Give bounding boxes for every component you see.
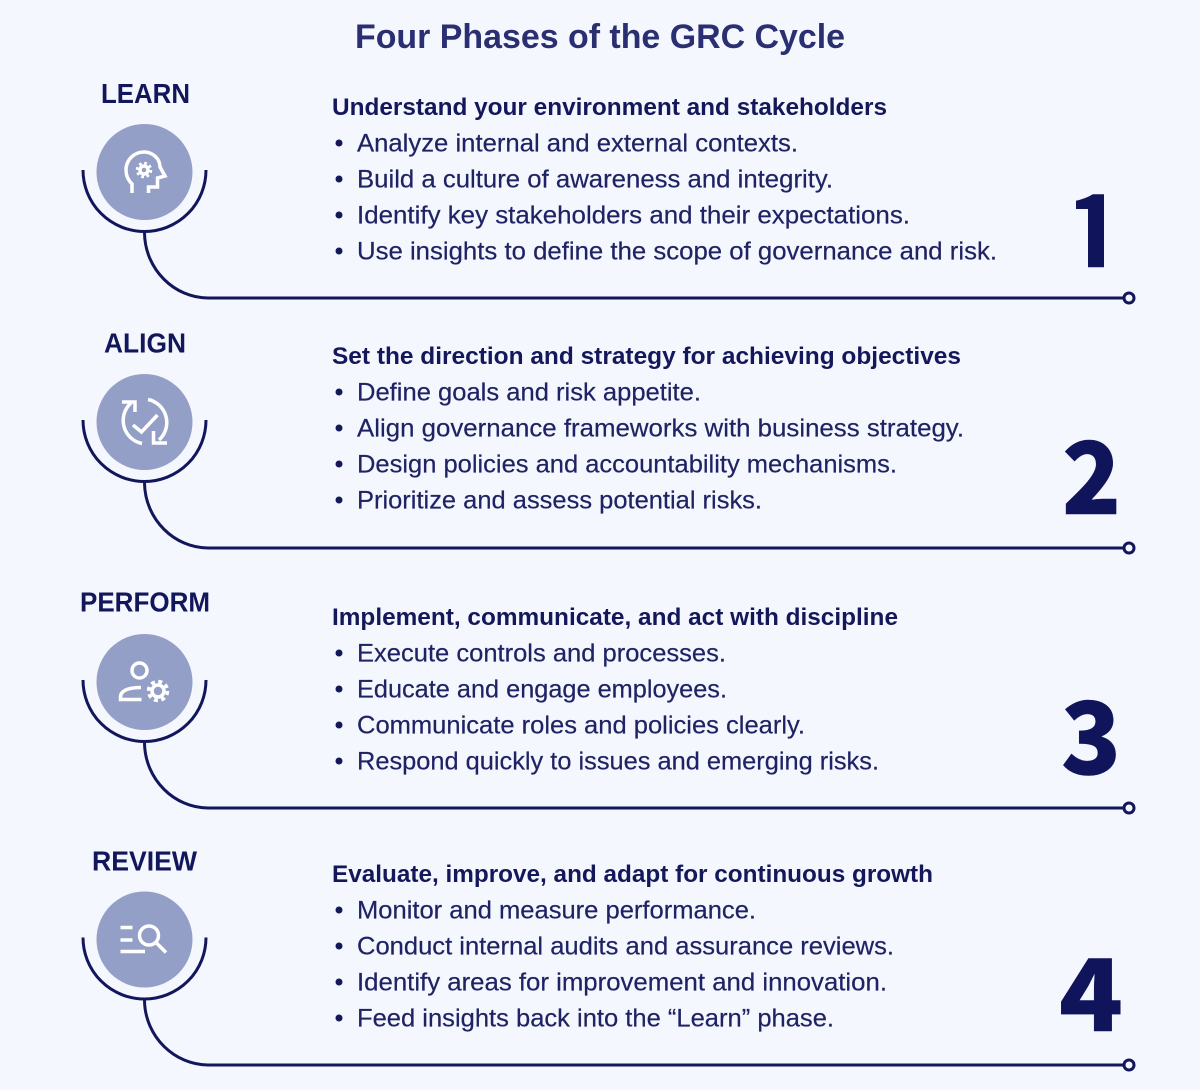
text block: learn: Analyze internal and external contexts.	[357, 130, 798, 158]
line end marker	[1124, 1060, 1134, 1070]
panel: learn phase	[83, 78, 1134, 303]
text block: review: Feed insights back into the “Learn” phase.	[357, 1004, 834, 1032]
text block: perform: Communicate roles and policies clearly.	[357, 712, 805, 740]
text block: perform: Respond quickly to issues and emerging risks.	[357, 748, 879, 776]
number 3: 3	[1061, 658, 1121, 803]
number 1: 1	[1065, 151, 1125, 296]
phase label: PERFORM: PERFORM	[80, 586, 210, 618]
text block: align: Align governance frameworks with business strategy.	[357, 414, 964, 442]
text block: perform: Educate and engage employees.	[357, 676, 727, 704]
text block: learn: Use insights to define the scope of governance and risk.	[357, 238, 997, 266]
text block: align: Prioritize and assess potential risks.	[357, 486, 762, 514]
line end marker	[1124, 293, 1134, 303]
number 2: 2	[1062, 398, 1121, 543]
panel: review phase	[83, 846, 1134, 1070]
connector line	[83, 170, 1123, 298]
text block: align: Set the direction and strategy for achieving objectives	[332, 343, 961, 370]
panel: align phase	[83, 328, 1134, 553]
icon: head with gear	[96, 124, 192, 220]
text block: align: Define goals and risk appetite.	[357, 378, 701, 406]
text block: align	[332, 343, 964, 514]
text block: learn: Understand your environment and stakeholders	[332, 94, 887, 121]
text block: perform	[332, 604, 898, 776]
text block: review	[332, 861, 933, 1032]
title: Four Phases of the GRC Cycle	[355, 18, 845, 56]
text block: align: Design policies and accountability mechanisms.	[357, 450, 897, 478]
text block: learn	[332, 94, 997, 266]
text block: learn: Build a culture of awareness and integrity.	[357, 166, 833, 194]
text block: review: Conduct internal audits and assurance reviews.	[357, 932, 894, 960]
number 4: 4	[1059, 915, 1123, 1060]
connector line	[83, 938, 1123, 1065]
text block: learn: Identify key stakeholders and their expectations.	[357, 202, 910, 230]
icon: list with magnifier	[96, 892, 192, 988]
connector line	[83, 420, 1123, 548]
text block: review: Monitor and measure performance.	[357, 896, 756, 924]
icon: person with gear	[96, 634, 192, 730]
text block: review: Evaluate, improve, and adapt for continuous growth	[332, 861, 933, 888]
icon: sync with check	[96, 374, 192, 470]
text block: review: Identify areas for improvement and innovation.	[357, 968, 887, 996]
phase label: ALIGN: ALIGN	[104, 328, 186, 358]
text block: perform: Execute controls and processes.	[357, 640, 726, 668]
phase label: REVIEW: REVIEW	[92, 846, 197, 876]
text block: perform: Implement, communicate, and act with discipline	[332, 604, 898, 631]
connector line	[83, 680, 1123, 808]
line end marker	[1124, 543, 1134, 553]
line end marker	[1124, 803, 1134, 813]
panel: perform phase	[80, 586, 1134, 813]
phase label: LEARN: LEARN	[101, 78, 190, 109]
